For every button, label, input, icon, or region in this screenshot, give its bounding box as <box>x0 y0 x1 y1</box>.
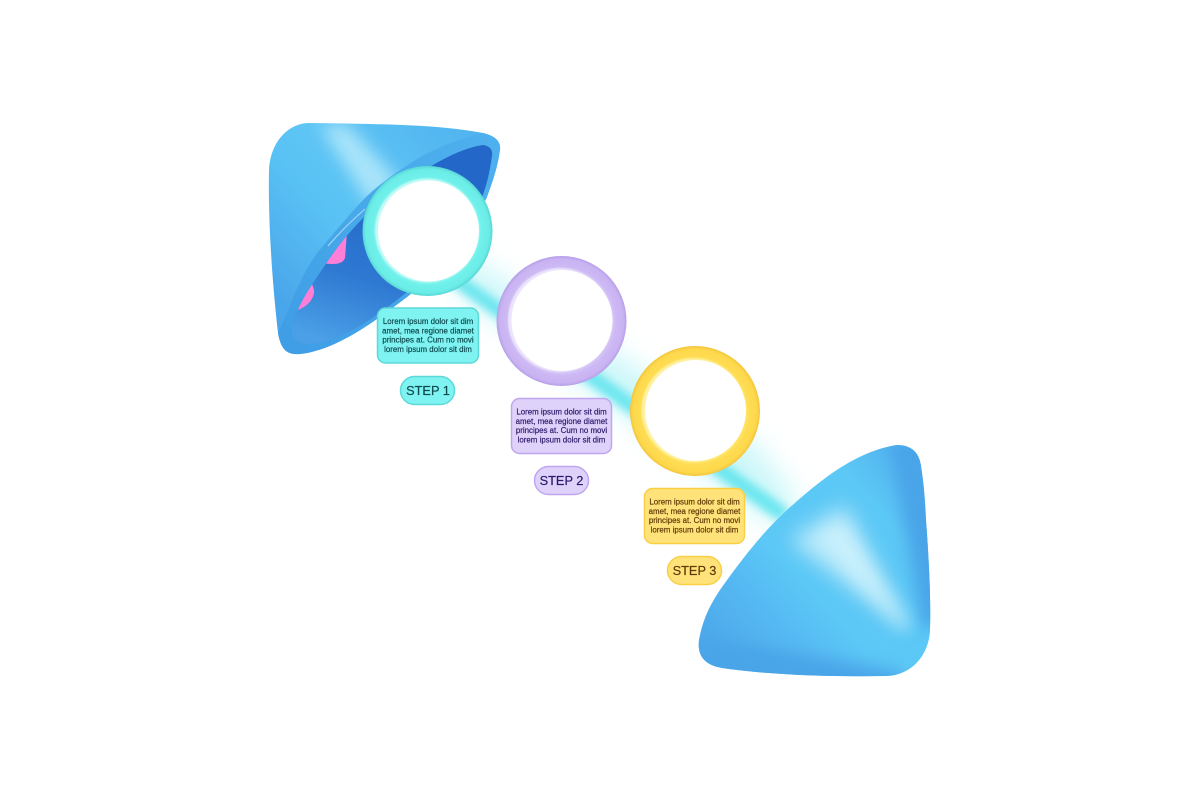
step 2 label <box>534 466 588 494</box>
step 3 text box <box>644 488 744 544</box>
cone highlight <box>320 125 398 208</box>
step 1 text box: amet, mea regione diamet <box>382 326 475 335</box>
step 2 text box: Lorem ipsum dolor sit dim <box>516 408 607 416</box>
rim light edge <box>328 209 365 246</box>
step 1 ring <box>362 166 492 296</box>
cone body <box>269 123 500 354</box>
cone rim <box>278 133 500 354</box>
step 2 ring <box>496 256 626 386</box>
step 1 label: STEP 1 <box>406 383 450 398</box>
pink shapes inside cone <box>298 236 347 310</box>
infographic canvas <box>268 123 930 676</box>
step 3 ring <box>630 346 760 476</box>
step 2 text box: amet, mea regione diamet <box>516 417 608 426</box>
step 3 label <box>668 556 722 584</box>
step 1 text box: lorem ipsum dolor sit dim <box>384 345 472 354</box>
step 3 label: STEP 3 <box>673 563 716 578</box>
step 1 label <box>400 376 454 404</box>
top-left cone <box>269 123 500 354</box>
step 2 text box <box>512 398 612 454</box>
step 1 text box <box>378 308 478 363</box>
step 2 text box: lorem ipsum dolor sit dim <box>518 435 606 444</box>
step 1 text box: principes at. Cum no movi <box>382 336 474 344</box>
cone opening <box>285 145 492 344</box>
step 3 text box: Lorem ipsum dolor sit dim <box>649 498 740 506</box>
step 3 text box: principes at. Cum no movi <box>649 516 740 525</box>
step 2 label: STEP 2 <box>540 473 583 488</box>
step 3 text box: lorem ipsum dolor sit dim <box>651 525 739 534</box>
step 3 text box: amet, mea regione diamet <box>649 507 741 516</box>
glowing beam <box>450 255 800 525</box>
bottom-right cone <box>698 445 930 676</box>
step 1 text box: Lorem ipsum dolor sit dim <box>383 317 474 326</box>
step 2 text box: principes at. Cum no movi <box>516 426 607 435</box>
